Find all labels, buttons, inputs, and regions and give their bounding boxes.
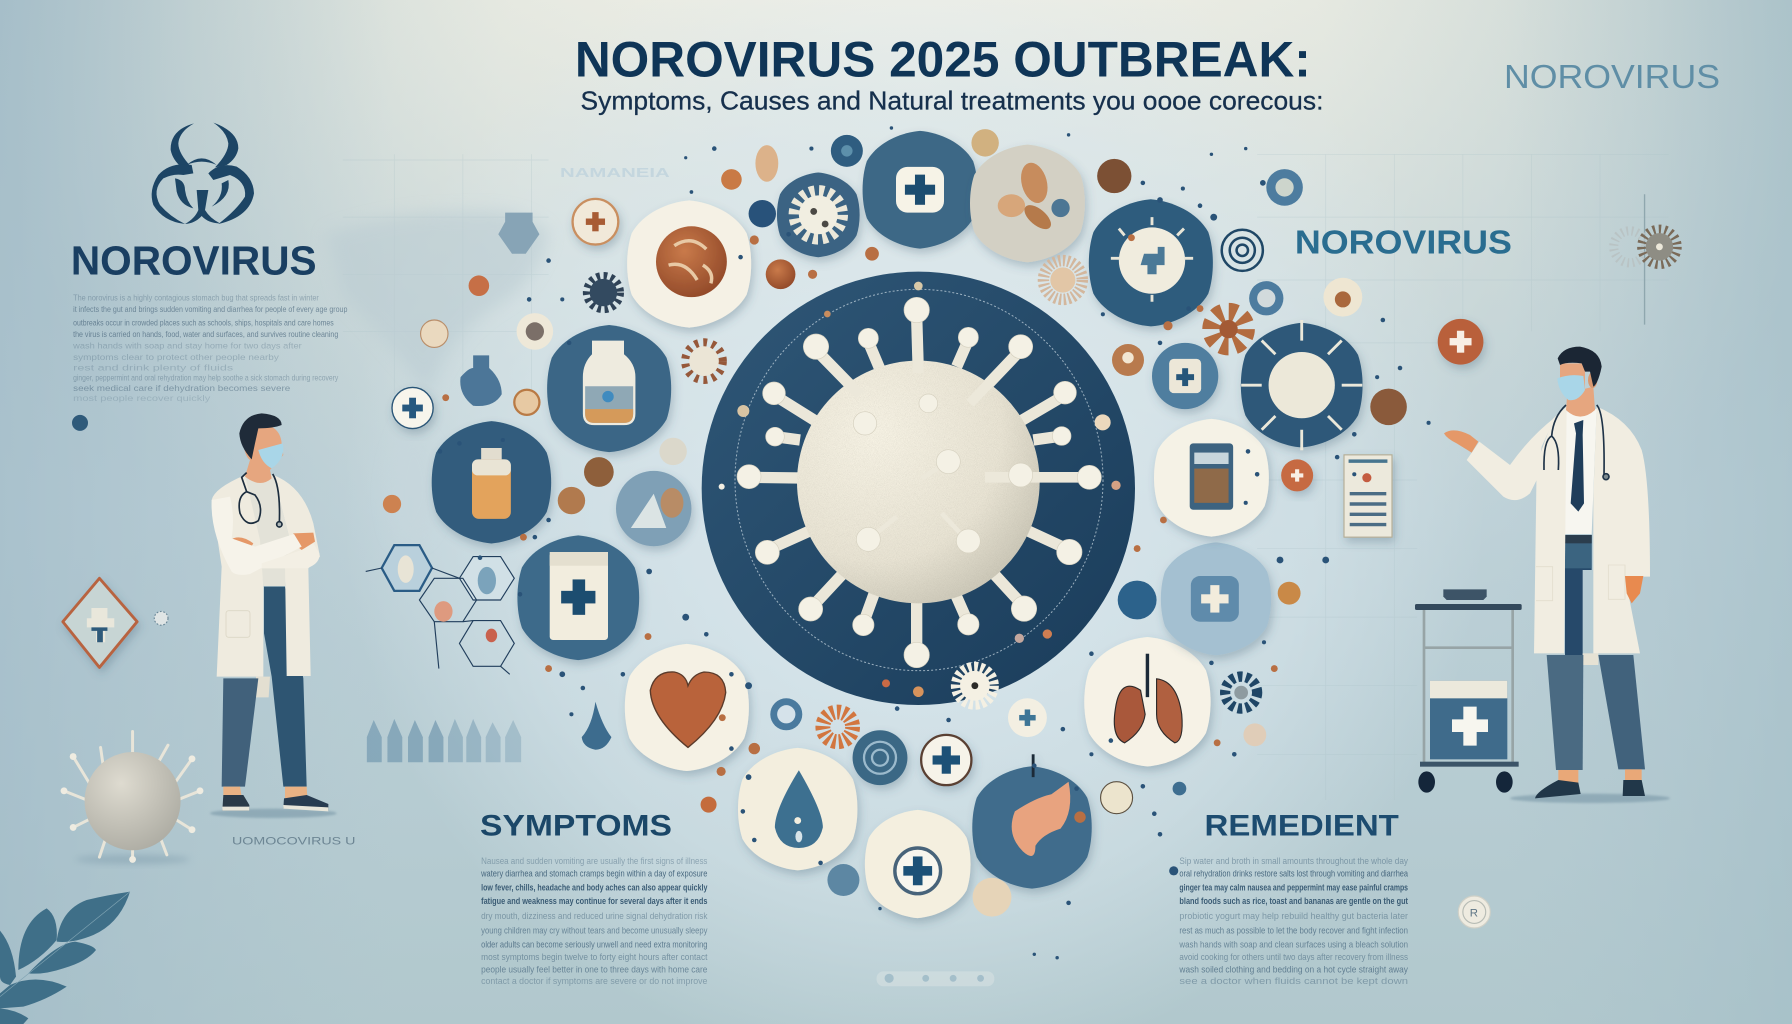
panel: water drop [738, 748, 857, 870]
small seal [1463, 901, 1486, 923]
icon: blue jar [460, 355, 502, 406]
icon: orange plus [1438, 319, 1483, 365]
small seal: R [1470, 908, 1478, 920]
remedies text: probiotic yogurt may help rebuild healthy gut bacteria later [1179, 911, 1408, 921]
title: NOROVIRUS 2025 OUTBREAK: [575, 31, 1311, 88]
left text block: it infects the gut and brings sudden vomiting and diarrhea for people of every age group [73, 304, 348, 314]
left text block: rest and drink plenty of fluids [73, 362, 233, 372]
symptoms text: contact a doctor if symptoms are severe or do not improve [481, 976, 707, 986]
central virus [702, 272, 1135, 705]
icon: orange star [1281, 459, 1313, 491]
scattered small icons [383, 129, 1490, 928]
SYMPTOMS heading: SYMPTOMS [480, 809, 672, 842]
panel: beige supplements [970, 145, 1085, 262]
left heading: NOROVIRUS [71, 237, 317, 283]
symptoms text: dry mouth, dizziness and reduced urine signal dehydration risk [481, 911, 708, 921]
spikes behind body [749, 317, 1069, 653]
panel: jar icon [1152, 343, 1218, 409]
right hand [1625, 576, 1643, 603]
icon: dark germ [587, 277, 619, 309]
navy disc [702, 272, 1135, 705]
left text block: the virus is carried on hands, food, water and surfaces, and survives routine cleaning [73, 329, 338, 339]
shirt [245, 475, 290, 586]
REMEDIENT heading: REMEDIENT [1205, 809, 1399, 842]
remedies text: wash hands with soap and clean surfaces using a bleach solution [1179, 939, 1408, 949]
left text block: The norovirus is a highly contagious stomach bug that spreads fast in winter [73, 293, 319, 303]
faint world map [326, 210, 549, 544]
faint map label: NAMANEIA [560, 166, 670, 180]
panel: lungs [1084, 637, 1211, 766]
icon: orange burst [823, 712, 853, 742]
icon: biohazard symbol [152, 123, 254, 224]
remedies text: see a doctor when fluids cannot be kept down [1179, 976, 1408, 986]
grey germ top right [1614, 194, 1677, 325]
panel: bottle [547, 325, 671, 452]
panel: intestine [972, 754, 1092, 889]
crossed arms [212, 497, 302, 575]
cart [1415, 589, 1522, 793]
hair [239, 413, 282, 459]
inner stalks [816, 317, 1089, 540]
doctor right [1444, 347, 1670, 803]
remedies text: rest as much as possible to let the body recover and fight infection [1179, 926, 1408, 936]
icon: ring [517, 313, 553, 350]
doctor left [210, 413, 337, 818]
icon: spiral ring [1222, 230, 1263, 271]
left text block [72, 293, 348, 403]
hexagon cluster [366, 545, 514, 674]
panel: medicine box [517, 535, 639, 660]
remedies text: avoid cooking for others until two days after recovery from illness [1179, 952, 1408, 962]
icon: document [1344, 455, 1392, 537]
lab coat [1534, 407, 1567, 653]
panel: grey capsule [616, 471, 691, 546]
cart box [1430, 681, 1507, 759]
panel: white virus [1241, 320, 1363, 450]
symptoms text: older adults can become seriously unwell and need extra monitoring [481, 939, 707, 949]
small round glyph [154, 611, 168, 625]
pocket lines [1536, 565, 1625, 601]
shoes [1535, 780, 1645, 798]
mask [1557, 375, 1585, 400]
symptoms text: Nausea and sudden vomiting are usually the first signs of illness [481, 856, 708, 866]
caption under virus: UOMOCOVIRUS U [232, 836, 355, 848]
left text block: symptoms clear to protect other people nearby [73, 352, 280, 362]
pointing arm [1467, 417, 1555, 500]
leaf [0, 892, 130, 1024]
panel: cookie food [627, 200, 751, 328]
symptoms text [480, 856, 708, 986]
symptoms text: low fever, chills, headache and body aches can also appear quickly [481, 882, 708, 892]
scattered particles [438, 126, 1431, 959]
icon: orange star ring [573, 199, 618, 245]
tie [1571, 420, 1584, 512]
remedies text: oral rehydration drinks restore salts lost through vomiting and diarrhea [1179, 869, 1409, 879]
icon: spiky tan germ [687, 344, 721, 378]
subtitle: Symptoms, Causes and Natural treatments you oooe corecous: [581, 86, 1323, 116]
shirt [1565, 408, 1597, 534]
grey virus bottom left [61, 731, 203, 864]
top right label: NOROVIRUS [1504, 59, 1720, 96]
trousers [1547, 655, 1583, 770]
coat tail [1583, 653, 1598, 665]
left text block: seek medical care if dehydration becomes severe [73, 383, 291, 393]
symptoms text: most symptoms begin twelve to forty eight hours after contact [481, 952, 708, 962]
trousers [222, 678, 258, 787]
icon: plus button [921, 735, 971, 785]
small dot [72, 415, 88, 431]
left text block: outbreaks occur in crowded places such as schools, ships, hospitals and care homes [73, 318, 334, 328]
panel: white germ [1089, 199, 1213, 326]
hair [1558, 347, 1602, 387]
icon: spiky orange leaf [1213, 313, 1245, 345]
lab coat [212, 475, 263, 677]
left text block: most people recover quickly [73, 393, 211, 403]
virus body [797, 361, 1040, 603]
stethoscope [239, 473, 282, 527]
neck and face [243, 423, 283, 483]
panel: heart [625, 644, 749, 771]
icon: dark spiky germ [1225, 677, 1257, 709]
coat tail [256, 677, 270, 697]
hands [230, 533, 315, 552]
panel: bandage cross [1161, 542, 1271, 655]
neck and face [1566, 387, 1595, 417]
right heading: NOROVIRUS [1295, 225, 1512, 262]
panel: orange jar [432, 421, 551, 543]
bottom pill row [877, 971, 994, 986]
symptoms text: young children may cry without tears and become unusually sleepy [481, 926, 708, 936]
panel: medical cross [863, 131, 977, 249]
icon: swirl button [853, 730, 907, 785]
panel: cream plus [865, 810, 971, 918]
icon: white burst germ [958, 669, 992, 703]
stethoscope [1544, 405, 1609, 480]
panel: tablet box [1154, 419, 1269, 537]
icon: plus badge [392, 387, 433, 429]
panel: spiky germ [777, 172, 860, 257]
remedies text: Sip water and broth in small amounts throughout the whole day [1179, 856, 1408, 866]
left text block: ginger, peppermint and oral rehydration may help soothe a sick stomach during recovery [73, 373, 339, 383]
symptoms text: fatigue and weakness may continue for several days after it ends [481, 896, 707, 906]
ankles [223, 787, 307, 798]
belt and inner trousers [1565, 535, 1592, 655]
left text block: wash hands with soap and stay home for two days after [72, 341, 302, 351]
symptoms text: watery diarrhea and stomach cramps begin within a day of exposure [480, 869, 707, 879]
spike knobs [737, 297, 1101, 668]
mini bar spikes [367, 719, 521, 762]
hexagon icons [398, 555, 497, 642]
cart poles [1424, 610, 1513, 763]
remedies text [1179, 856, 1409, 986]
ankles [1558, 769, 1642, 784]
mask [258, 443, 283, 468]
remedies text: ginger tea may calm nausea and peppermint may ease painful cramps [1179, 882, 1408, 892]
shoes [222, 795, 328, 811]
wheels [1496, 771, 1513, 793]
symptoms text: people usually feel better in one to three days with home care [481, 965, 707, 975]
cart tray [1415, 604, 1522, 610]
warning diamond [63, 578, 137, 667]
ring beads [719, 282, 1121, 697]
remedies text: wash soiled clothing and bedding on a hot cycle straight away [1179, 965, 1408, 975]
remedies text: bland foods such as rice, toast and bananas are gentle on the gut [1179, 896, 1408, 906]
dashed ring [735, 289, 1103, 671]
body grain [797, 361, 1040, 603]
